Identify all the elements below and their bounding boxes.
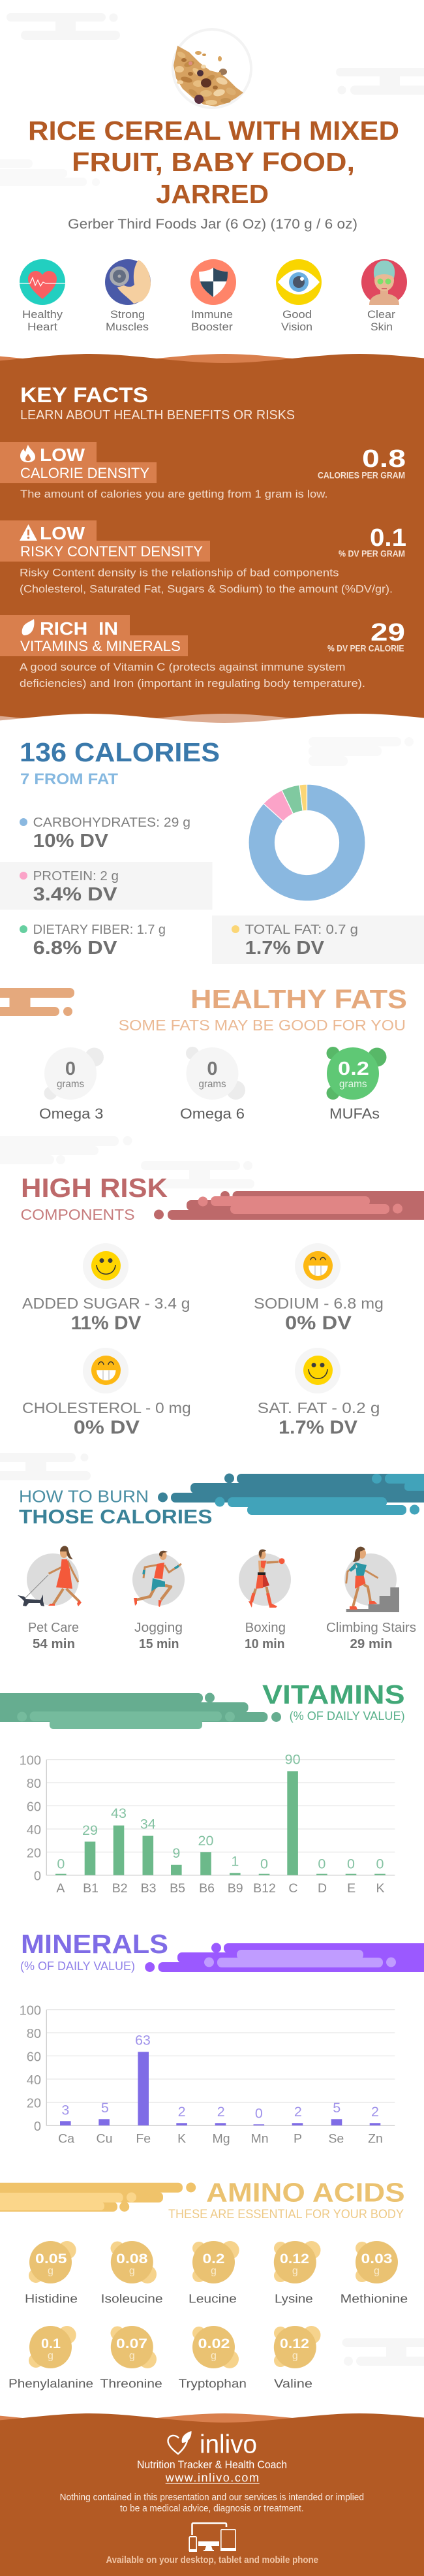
fact: rich in vitamins and minerals: % DV PER CALORIE [327, 644, 404, 653]
amino acid: methionine: g [374, 2266, 380, 2277]
icon: immune booster shield: Immune [191, 309, 233, 321]
bar chart: minerals: 5 [333, 2100, 341, 2116]
amino acid: tryptophan [179, 2326, 247, 2391]
bar chart: minerals: Se [328, 2132, 344, 2146]
amino acid: phenylalanine: Phenylalanine [8, 2377, 93, 2391]
bar chart: minerals: Fe [136, 2132, 151, 2146]
bar chart: minerals: 80 [27, 2027, 41, 2041]
heading: key facts: KEY FACTS [20, 383, 148, 407]
background cloud: above burn section [0, 1453, 91, 1480]
fact: low risky content density: RISKY CONTENT DENSITY [20, 543, 203, 560]
icon: clear skin: Clear [367, 309, 396, 321]
activity: climbing stairs: Climbing Stairs [326, 1621, 416, 1635]
heading: high risk [21, 1173, 168, 1223]
bar chart: vitamins: K [376, 1881, 385, 1896]
bar chart: vitamins: 40 [27, 1823, 41, 1837]
activity: climbing stairs [326, 1547, 416, 1651]
title: JARRED [156, 179, 269, 209]
bar chart: vitamins: 0 [318, 1856, 326, 1872]
bar chart: vitamins: 0 [347, 1856, 355, 1872]
panel: amino acids [0, 2178, 424, 2391]
heading: high risk: HIGH RISK [21, 1173, 168, 1203]
heading: amino acids: THESE ARE ESSENTIAL FOR YOUR BODY [168, 2208, 404, 2221]
bar chart: vitamins: 0 [34, 1869, 41, 1884]
bar chart: vitamins: D [318, 1881, 327, 1896]
amino acid: threonine: Threonine [100, 2377, 162, 2391]
bar chart: vitamins: 1 [231, 1854, 239, 1869]
risk item: sodium [254, 1243, 384, 1333]
fat item: omega 3: 0 [65, 1058, 76, 1079]
bar chart: vitamins: E [347, 1881, 356, 1896]
panel: key facts [0, 354, 424, 735]
decoration: burn banner [158, 1473, 424, 1515]
legend: protein: 3.4% DV [33, 884, 117, 905]
fat item: omega 6: 0 [207, 1058, 218, 1079]
risk item: saturated fat [258, 1348, 380, 1439]
website link: www.inlivo.com [165, 2472, 259, 2485]
activity: jogging: 15 min [139, 1637, 179, 1651]
amino acid: isoleucine: Isoleucine [101, 2292, 163, 2306]
fact: rich in vitamins and minerals [0, 615, 405, 690]
fact: low calorie density: LOW [40, 445, 85, 465]
bar chart: minerals: 20 [27, 2096, 41, 2110]
activity: boxing: 10 min [245, 1637, 284, 1651]
tagline: Nutrition Tracker & Health Coach [137, 2458, 287, 2471]
risk item: added sugar: 11% DV [71, 1312, 142, 1333]
decoration: minerals banner [145, 1943, 424, 1972]
fact: low calorie density: CALORIE DENSITY [20, 465, 149, 481]
amino acid: leucine: Leucine [189, 2292, 237, 2306]
bar chart: vitamins: B6 [199, 1881, 215, 1896]
amino acid: isoleucine: g [129, 2266, 135, 2277]
bar chart: vitamins: 80 [27, 1777, 41, 1791]
amino acid: leucine [189, 2241, 239, 2306]
bar chart: vitamins: 9 [172, 1845, 180, 1861]
panel: high risk components [21, 1173, 424, 1439]
amino acid: tryptophan: Tryptophan [179, 2377, 247, 2391]
legend: total fat: TOTAL FAT: 0.7 g [245, 923, 358, 937]
disclaimer [60, 2492, 364, 2514]
bar chart: vitamins: 0 [376, 1856, 384, 1872]
risk item: cholesterol [22, 1348, 191, 1439]
bar chart: minerals: 100 [20, 2004, 41, 2018]
panel: footer [0, 2413, 424, 2576]
decoration: vitamins banner [0, 1693, 281, 1729]
bar chart: vitamins: 20 [27, 1846, 41, 1860]
icon: smiling face [91, 1251, 121, 1280]
amino acid: tryptophan: g [211, 2351, 217, 2362]
bar chart: vitamins: C [288, 1881, 297, 1896]
activity: boxing: Boxing [245, 1621, 286, 1635]
bar chart: minerals: 3 [61, 2102, 69, 2118]
bar chart: vitamins: 60 [27, 1800, 41, 1814]
fat item: MUFAs: grams [339, 1079, 367, 1090]
icon: food photo of granola cereal [173, 29, 251, 108]
fact: low calorie density: The amount of calories you are getting from 1 gram is low. [20, 488, 327, 500]
fact: low calorie density: CALORIES PER GRAM [318, 470, 405, 481]
legend: carbohydrates [20, 816, 190, 851]
fat item: omega 6: Omega 6 [180, 1105, 245, 1122]
bar chart: minerals: 0 [34, 2120, 41, 2134]
icon: woman walking dog [18, 1546, 82, 1606]
fat item: MUFAs: MUFAs [329, 1105, 380, 1122]
bar chart: minerals: 60 [27, 2050, 41, 2065]
legend: protein [0, 862, 213, 910]
heading: how to burn: HOW TO BURN [19, 1487, 149, 1506]
logo: inlivo [168, 2430, 257, 2459]
amino acid: phenylalanine: g [48, 2351, 53, 2362]
fat item: omega 6: grams [198, 1079, 226, 1090]
heading: key facts: LEARN ABOUT HEALTH BENEFITS OR RISKS [20, 408, 295, 422]
bar chart: minerals: 2 [178, 2104, 186, 2120]
icon: desktop, tablet and phone [189, 2523, 236, 2552]
bar chart: vitamins: B1 [83, 1881, 98, 1896]
legend: total fat [212, 915, 424, 964]
fact: low risky content density: Risky Content density is the relationship of bad components [20, 567, 339, 579]
heading: how to burn [19, 1487, 213, 1528]
risk item: sodium: 0% DV [285, 1312, 352, 1333]
bar chart: vitamins: 90 [285, 1752, 301, 1768]
heading: vitamins [262, 1679, 405, 1723]
legend: carbohydrates: 10% DV [33, 831, 108, 851]
bar chart: vitamins: 34 [140, 1817, 156, 1832]
fat item: MUFAs: 0.2 [338, 1058, 369, 1079]
icon: healthy heart [20, 259, 65, 333]
amino acid: tryptophan: 0.02 [198, 2336, 230, 2351]
icon: immune booster shield: Booster [191, 321, 234, 333]
bar chart: minerals: Mn [250, 2132, 269, 2146]
legend: dietary fiber: 6.8% DV [33, 938, 117, 959]
heading: healthy fats: SOME FATS MAY BE GOOD FOR YOU [119, 1017, 406, 1034]
bar chart: minerals [20, 2004, 395, 2146]
panel: healthy fats [0, 984, 407, 1122]
fact: low calorie density [0, 442, 406, 500]
risk item: cholesterol: CHOLESTEROL - 0 mg [22, 1399, 191, 1416]
amino acid: valine: g [292, 2351, 298, 2362]
heading: high risk: COMPONENTS [21, 1206, 134, 1223]
bar chart: vitamins [20, 1752, 395, 1896]
fat item: omega 3: grams [57, 1079, 84, 1090]
legend: total fat: 1.7% DV [245, 938, 324, 959]
icon: smiling face [303, 1356, 333, 1385]
logo: inlivo: inlivo [200, 2430, 257, 2459]
icon: strong muscles [105, 259, 151, 333]
legend: dietary fiber: DIETARY FIBER: 1.7 g [33, 923, 166, 937]
amino acid: histidine [25, 2241, 78, 2306]
icon: good vision eye: Good [282, 309, 312, 321]
bar chart: minerals: 2 [217, 2104, 225, 2120]
bar chart: vitamins: B3 [141, 1881, 157, 1896]
panel: vitamins [0, 1679, 405, 1896]
heading: calories: 136 CALORIES [20, 737, 220, 767]
title: FRUIT, BABY FOOD, [72, 147, 355, 177]
heading: minerals: (% OF DAILY VALUE) [20, 1960, 135, 1973]
amino acid: phenylalanine: 0.1 [41, 2336, 61, 2351]
icon: healthy heart: Healthy [22, 309, 63, 321]
panel: how to burn those calories [18, 1473, 424, 1651]
bar chart: vitamins: B2 [112, 1881, 128, 1896]
activity: jogging [132, 1551, 185, 1651]
amino acid: leucine: g [211, 2266, 217, 2277]
heading: minerals [20, 1929, 168, 1973]
fact: rich in vitamins and minerals: RICH IN [40, 618, 118, 639]
bar chart: minerals: Mg [212, 2132, 230, 2146]
amino acid: leucine: 0.2 [202, 2251, 224, 2266]
bar chart: vitamins: 29 [82, 1822, 98, 1838]
icon: woman climbing [346, 1547, 378, 1610]
amino acid: histidine: 0.05 [35, 2251, 67, 2266]
amino acid: lysine [274, 2241, 321, 2306]
donut chart: macronutrients [249, 784, 365, 901]
heading: key facts [20, 383, 295, 422]
subtitle: serving size: Gerber Third Foods Jar (6 Oz) (170 g / 6 oz) [68, 217, 357, 232]
bar chart: minerals: P [294, 2132, 302, 2146]
amino acid: isoleucine [101, 2241, 163, 2306]
fat item: omega 6 [180, 1047, 245, 1122]
heading: amino acids: AMINO ACIDS [206, 2178, 405, 2208]
legend: carbohydrates: CARBOHYDRATES: 29 g [33, 816, 190, 830]
activity: jogging: Jogging [134, 1621, 183, 1635]
title: RICE CEREAL WITH MIXED [28, 116, 399, 146]
bar chart: minerals: 0 [255, 2105, 263, 2121]
decoration: high risk banner [154, 1191, 424, 1220]
amino acid: phenylalanine [8, 2326, 93, 2391]
amino acid: threonine [100, 2326, 162, 2391]
fact: low risky content density: (Cholesterol, Saturated Fat, Sugars & Sodium) to the amount (%DV/gr). [20, 584, 393, 596]
icon: strong muscles: Strong [110, 309, 145, 321]
panel: minerals [20, 1929, 424, 2146]
amino acid: threonine: g [129, 2351, 135, 2362]
bar chart: vitamins: 0 [57, 1856, 65, 1872]
amino acid: valine: 0.12 [280, 2336, 309, 2351]
amino acid: lysine: Lysine [275, 2292, 313, 2306]
decoration: healthy fats banner [0, 988, 74, 1016]
icon: grinning face [91, 1356, 121, 1385]
bar chart: minerals: K [177, 2132, 186, 2146]
title [28, 116, 399, 209]
bar chart: minerals: 5 [101, 2100, 109, 2116]
heading: healthy fats: HEALTHY FATS [190, 984, 407, 1014]
bar chart: vitamins: 100 [20, 1754, 41, 1768]
risk item: added sugar [22, 1243, 190, 1333]
heading: calories: 7 FROM FAT [20, 771, 118, 788]
icon: flame [20, 445, 35, 462]
fact: rich in vitamins and minerals: A good source of Vitamin C (protects against immune system [20, 661, 346, 673]
icon: healthy heart: Heart [27, 321, 57, 333]
amino acid: methionine [341, 2241, 408, 2306]
fact: low calorie density: 0.8 [362, 445, 406, 473]
risk item: saturated fat: SAT. FAT - 0.2 g [258, 1399, 380, 1416]
icon: clear skin: Skin [371, 321, 393, 333]
fat item: MUFAs [326, 1047, 386, 1122]
heading: minerals: MINERALS [21, 1929, 168, 1959]
icon: stairs [346, 1587, 399, 1612]
availability note: Available on your desktop, tablet and mobile phone [106, 2555, 318, 2566]
fact: rich in vitamins and minerals: VITAMINS & MINERALS [20, 638, 181, 654]
amino acid: isoleucine: 0.08 [116, 2251, 148, 2266]
risk item: sodium: SODIUM - 6.8 mg [254, 1295, 384, 1312]
amino acid: threonine: 0.07 [116, 2336, 147, 2351]
bar chart: minerals: 40 [27, 2073, 41, 2088]
risk item: saturated fat: 1.7% DV [279, 1418, 358, 1439]
activity: boxing [239, 1550, 291, 1651]
risk item: cholesterol: 0% DV [74, 1418, 140, 1439]
heading: calories [20, 737, 220, 788]
disclaimer: Nothing contained in this presentation and our services is intended or implied [60, 2492, 364, 2503]
amino acid: histidine: g [48, 2266, 53, 2277]
bar chart: vitamins: 43 [111, 1805, 127, 1821]
activity: pet care [18, 1546, 82, 1651]
amino acid: histidine: Histidine [25, 2292, 78, 2306]
heading: how to burn: THOSE CALORIES [19, 1505, 213, 1528]
bar chart: vitamins: A [56, 1881, 65, 1896]
amino acid: lysine: 0.12 [280, 2251, 309, 2266]
icon: jogger [134, 1551, 181, 1607]
amino acid: valine: Valine [274, 2377, 312, 2391]
fat item: omega 3 [39, 1047, 104, 1122]
icon: warning triangle [20, 524, 37, 541]
background clouds: above high risk [0, 1136, 254, 1188]
activity: climbing stairs: 29 min [350, 1637, 393, 1651]
icon: good vision eye [276, 259, 322, 333]
amino acid: lysine: g [292, 2266, 298, 2277]
bar chart: minerals: 2 [371, 2104, 379, 2120]
fact: rich in vitamins and minerals: deficiencies) and Iron (important in regulating body temperature). [20, 678, 365, 690]
bar chart: vitamins: B9 [228, 1881, 243, 1896]
bar chart: vitamins: B5 [170, 1881, 185, 1896]
fat item: omega 3: Omega 3 [39, 1105, 103, 1122]
bar chart: vitamins: 0 [260, 1856, 268, 1872]
amino acid: methionine: Methionine [341, 2292, 408, 2306]
amino acid: valine [274, 2326, 321, 2391]
icon: strong muscles: Muscles [106, 321, 149, 333]
risk item: added sugar: ADDED SUGAR - 3.4 g [22, 1295, 190, 1312]
activity: pet care: 54 min [33, 1637, 75, 1651]
bar chart: minerals: 2 [294, 2104, 302, 2120]
bar chart: vitamins: 20 [198, 1833, 213, 1849]
icon: boxer [249, 1550, 284, 1608]
decoration: amino acids banner [0, 2182, 196, 2212]
fact: rich in vitamins and minerals: 29 [371, 619, 405, 646]
heading: amino acids [168, 2178, 405, 2221]
icon: leaf [22, 619, 34, 635]
heading: healthy fats [119, 984, 407, 1034]
heading: vitamins: (% OF DAILY VALUE) [290, 1709, 405, 1723]
icon: good vision eye: Vision [281, 321, 312, 333]
legend: protein: PROTEIN: 2 g [33, 869, 119, 883]
fact: low risky content density: 0.1 [370, 524, 406, 552]
disclaimer: to be a medical advice, diagnosis or treatment. [120, 2504, 304, 2514]
legend: dietary fiber [20, 923, 166, 959]
fact: low risky content density: LOW [40, 523, 85, 543]
activity: pet care: Pet Care [28, 1621, 79, 1635]
fact: low risky content density: % DV PER GRAM [339, 549, 405, 559]
background clouds: header [0, 13, 424, 186]
fact: low risky content density [0, 520, 406, 596]
icon: immune booster shield [190, 259, 236, 333]
bar chart: minerals: 63 [135, 2033, 151, 2048]
bar chart: minerals: Ca [58, 2132, 74, 2146]
benefit icons row [20, 259, 407, 333]
amino acid: methionine: 0.03 [361, 2251, 393, 2266]
bar chart: vitamins: B12 [253, 1881, 276, 1896]
panel: calories [0, 737, 424, 964]
bar chart: minerals: Cu [97, 2132, 112, 2146]
icon: clear skin [361, 259, 407, 333]
icon: grinning face [303, 1251, 333, 1280]
bar chart: minerals: Zn [368, 2132, 383, 2146]
heading: vitamins: VITAMINS [262, 1679, 405, 1709]
